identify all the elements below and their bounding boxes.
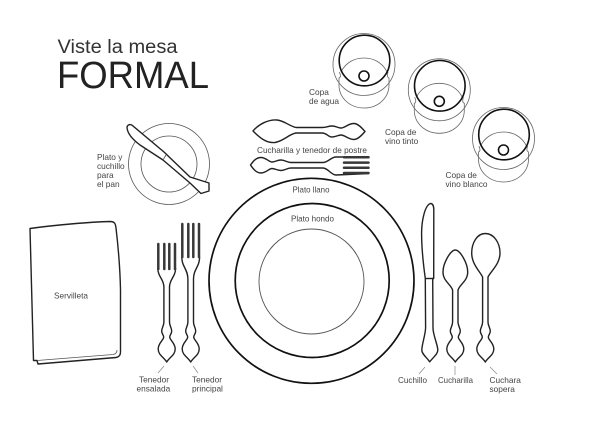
salad fork (158, 244, 176, 362)
leader lines for knife and spoons (419, 366, 497, 375)
title: Viste la mesa (58, 37, 178, 58)
label: napkin: Servilleta (54, 290, 88, 300)
dessert spoon (253, 120, 365, 143)
main fork (182, 224, 200, 362)
label: main fork: principal (192, 384, 223, 394)
label: water glass (309, 87, 339, 106)
bread plate and butter knife (127, 124, 210, 204)
dinner plates (209, 178, 414, 383)
label: soup spoon: Cuchara (490, 375, 521, 385)
label: red wine glass: Copa de (385, 127, 417, 137)
knife (422, 204, 438, 362)
red wine glass (408, 59, 470, 133)
label: red wine glass: vino tinto (385, 136, 419, 146)
teaspoon (443, 250, 468, 362)
label: soup spoon (490, 375, 521, 394)
label: main fork: Tenedor (192, 374, 222, 384)
label: salad fork (136, 374, 171, 394)
label: dessert cutlery: Cucharilla y tenedor de postre (257, 145, 367, 155)
label: soup spoon: sopera (490, 384, 515, 394)
label: bread plate: Plato y (97, 152, 123, 162)
label: white wine glass: Copa de (446, 170, 477, 180)
water glass (333, 34, 395, 108)
label: bread plate: el pan (97, 179, 120, 189)
label: water glass: de agua (309, 96, 339, 106)
label: salad fork: Tenedor (139, 374, 169, 384)
soup spoon (472, 234, 500, 362)
white wine glass (472, 108, 534, 182)
label: white wine glass (446, 170, 488, 189)
label: knife: Cuchillo (398, 375, 427, 385)
dessert fork (250, 157, 369, 175)
label: water glass: Copa (309, 87, 329, 97)
label: bread plate (97, 152, 125, 189)
label: teaspoon: Cucharilla (438, 375, 473, 385)
label: salad fork: ensalada (136, 384, 171, 394)
napkin (30, 222, 120, 364)
label: dinner plate: Plato llano (292, 184, 330, 194)
label: main fork (192, 374, 223, 394)
title: FORMAL (57, 55, 209, 97)
label: bread plate: para (97, 170, 114, 180)
leader lines for forks (158, 366, 198, 373)
title (57, 37, 209, 97)
label: soup plate: Plato hondo (291, 214, 334, 224)
label: bread plate: cuchillo (97, 161, 125, 171)
label: red wine glass (385, 127, 419, 146)
label: white wine glass: vino blanco (446, 179, 488, 189)
